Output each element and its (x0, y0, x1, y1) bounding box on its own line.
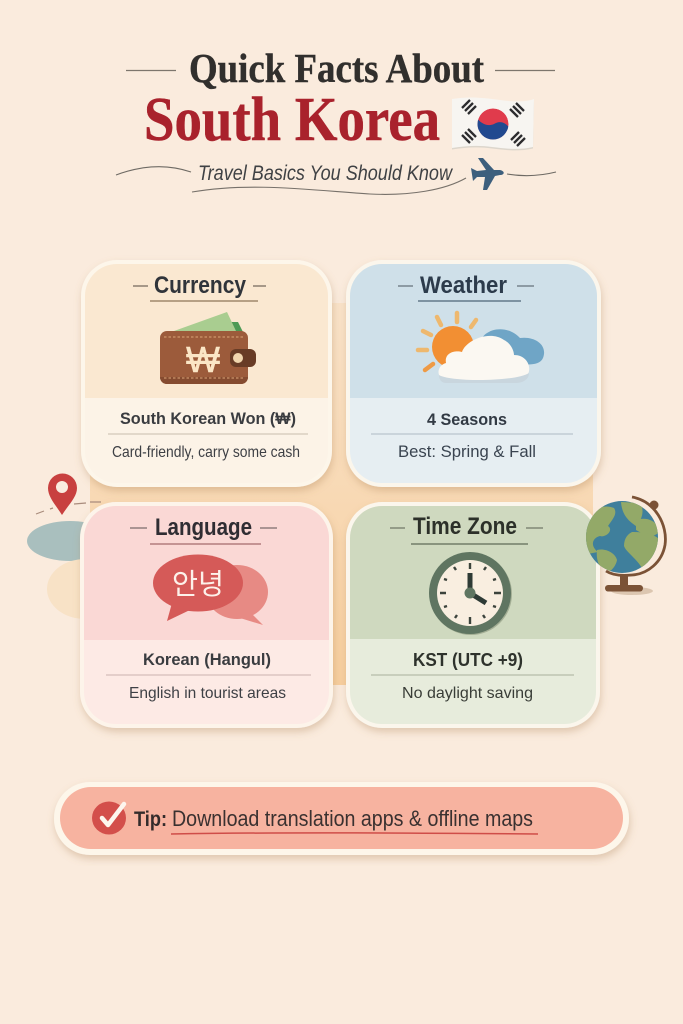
panel: time zone (346, 502, 600, 728)
panel: language (80, 502, 333, 728)
icon: korean flag (452, 97, 534, 150)
heading: south korea: South Korea (144, 86, 440, 154)
tip label: Tip: (134, 808, 167, 831)
icon: wallet (160, 312, 256, 384)
icon: globe (582, 497, 665, 595)
heading: time zone: Time Zone (413, 513, 517, 540)
panel: tip banner (54, 782, 629, 855)
icon: speech bubbles (153, 554, 268, 625)
panel: currency (81, 260, 332, 487)
detail: English in tourist areas (129, 685, 286, 702)
heading: weather: Weather (420, 272, 507, 299)
heading: language: Language (155, 514, 252, 541)
icon: sun and clouds (418, 313, 544, 383)
detail: Best: Spring & Fall (398, 442, 536, 461)
heading: currency: Currency (154, 272, 247, 299)
title block (116, 45, 556, 194)
detail: No daylight saving (402, 685, 533, 702)
korean greeting: 안녕 (172, 561, 224, 603)
decorative map blobs (27, 521, 113, 561)
heading: quick facts: Quick Facts About (189, 45, 484, 91)
main fact: South Korean Won (₩) (120, 409, 296, 428)
icon: clock (429, 552, 512, 635)
won symbol: ₩ (186, 339, 220, 380)
main fact: Korean (Hangul) (143, 650, 271, 669)
icon: check badge (92, 802, 126, 834)
icon: map pin (36, 473, 101, 515)
main fact: KST (UTC +9) (413, 650, 523, 670)
main fact: 4 Seasons (427, 410, 507, 429)
backdrop panel behind cards (90, 303, 593, 685)
tip text: Download translation apps & offline maps (172, 806, 533, 831)
icon: airplane (471, 158, 504, 190)
panel: weather (346, 260, 601, 487)
subtitle: Travel Basics You Should Know (198, 162, 454, 185)
detail: Card-friendly, carry some cash (112, 444, 300, 461)
